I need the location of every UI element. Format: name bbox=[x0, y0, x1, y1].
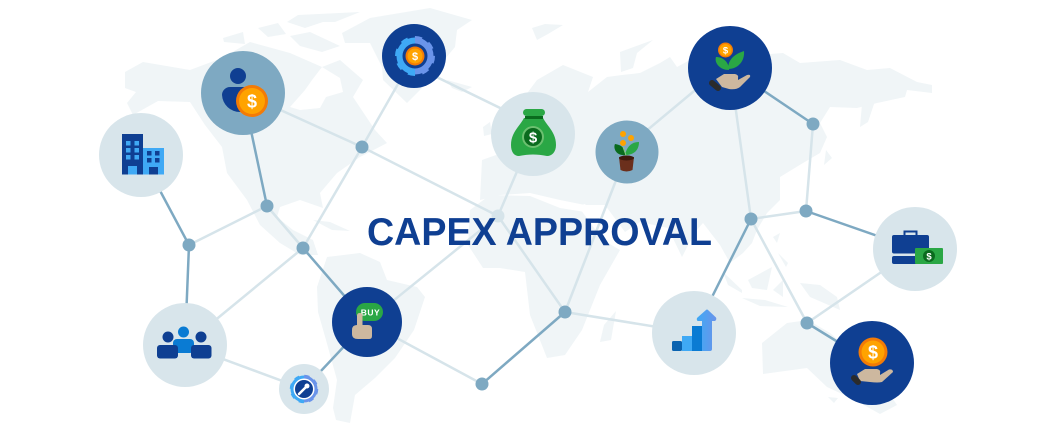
Madagascar bbox=[600, 311, 616, 342]
Greenland bbox=[342, 8, 472, 103]
icon: hand with plant and coin bbox=[688, 26, 772, 110]
North America bbox=[125, 42, 387, 255]
icon: growth chart bbox=[652, 291, 736, 375]
icon: gear with coin: $ bbox=[412, 51, 418, 63]
icon: buy button bbox=[332, 287, 402, 357]
Hudson Bay bbox=[290, 67, 343, 110]
Iceland sliver bbox=[447, 80, 472, 92]
icon: team of people bbox=[143, 303, 227, 387]
Arctic islands bbox=[223, 12, 360, 52]
icon: person with coin bbox=[201, 51, 285, 135]
icon: hand with plant and coin: $ bbox=[723, 46, 729, 56]
icon: wrench gear bbox=[279, 364, 329, 414]
icon: briefcase with cash: $ bbox=[926, 252, 932, 262]
Africa bbox=[468, 195, 620, 358]
Australia bbox=[762, 320, 897, 414]
icon: hand with coin: $ bbox=[868, 342, 878, 362]
Eurasia bbox=[480, 53, 932, 263]
icon: office buildings bbox=[99, 113, 183, 197]
icon: gear with coin bbox=[382, 24, 446, 88]
Novaya Zemlya bbox=[620, 40, 653, 72]
Cuba bbox=[313, 220, 350, 231]
icon: hand with coin bbox=[830, 321, 914, 405]
network nodes bbox=[182, 118, 820, 390]
East Asian islands bbox=[723, 95, 877, 310]
icon: money bag: $ bbox=[529, 130, 538, 146]
icon: person with coin: $ bbox=[247, 92, 257, 112]
icon: potted plant with coins bbox=[596, 120, 658, 184]
icon: buy button: BUY bbox=[361, 308, 380, 318]
title: CAPEX APPROVAL bbox=[367, 211, 712, 254]
Svalbard and UK bbox=[483, 24, 563, 136]
icon: money bag bbox=[491, 92, 575, 176]
icon: briefcase with cash bbox=[873, 207, 957, 291]
world map bbox=[125, 8, 932, 423]
South America bbox=[317, 253, 425, 423]
network connections bbox=[141, 56, 915, 389]
Red sea bbox=[578, 204, 612, 243]
